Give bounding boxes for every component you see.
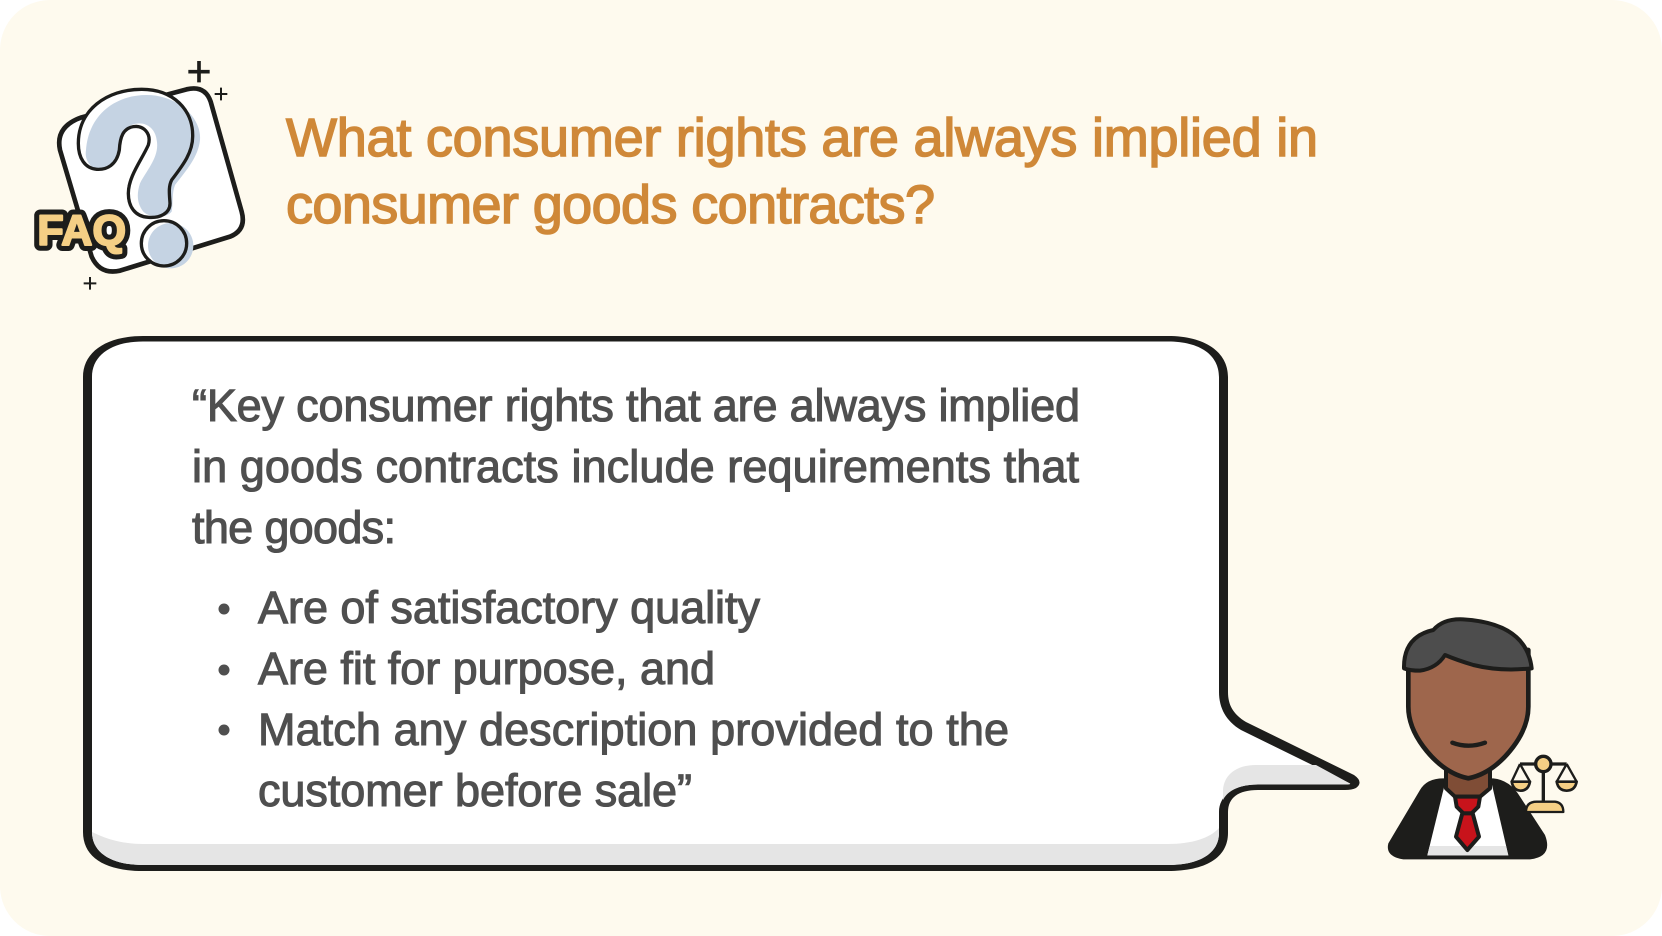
quote text: “Key consumer rights that are always implied (192, 380, 1080, 431)
card (59, 88, 243, 271)
bullet list: customer before sale” (258, 765, 692, 816)
title: consumer goods contracts? (286, 175, 935, 235)
smile (1452, 743, 1485, 746)
title: What consumer rights are always implied in (286, 108, 1318, 168)
title (286, 108, 1318, 235)
sparkles (84, 61, 227, 290)
icon: FAQ question mark (37, 61, 243, 290)
shirt (1427, 783, 1508, 855)
icon: lawyer with scales (1388, 619, 1577, 859)
question mark dot (141, 221, 193, 268)
quote text (192, 380, 1080, 816)
hair (1404, 619, 1532, 671)
tie (1455, 797, 1480, 850)
speech bubble (83, 336, 1360, 871)
neck (1446, 770, 1490, 797)
quote text: the goods: (192, 502, 396, 553)
quote text: in goods contracts include requirements that (192, 441, 1079, 492)
scales (1512, 756, 1577, 812)
question mark (78, 89, 200, 217)
face (1408, 650, 1528, 778)
bubble shading (92, 765, 1350, 865)
FAQ label: FAQ (37, 207, 126, 255)
bullet list: Match any description provided to the (258, 704, 1009, 755)
FAQ label: FAQ (37, 207, 126, 255)
bullet list: Are of satisfactory quality (258, 582, 760, 633)
jacket (1388, 778, 1547, 859)
bullet list: Are fit for purpose, and (258, 643, 715, 694)
bullet list (218, 582, 1009, 816)
